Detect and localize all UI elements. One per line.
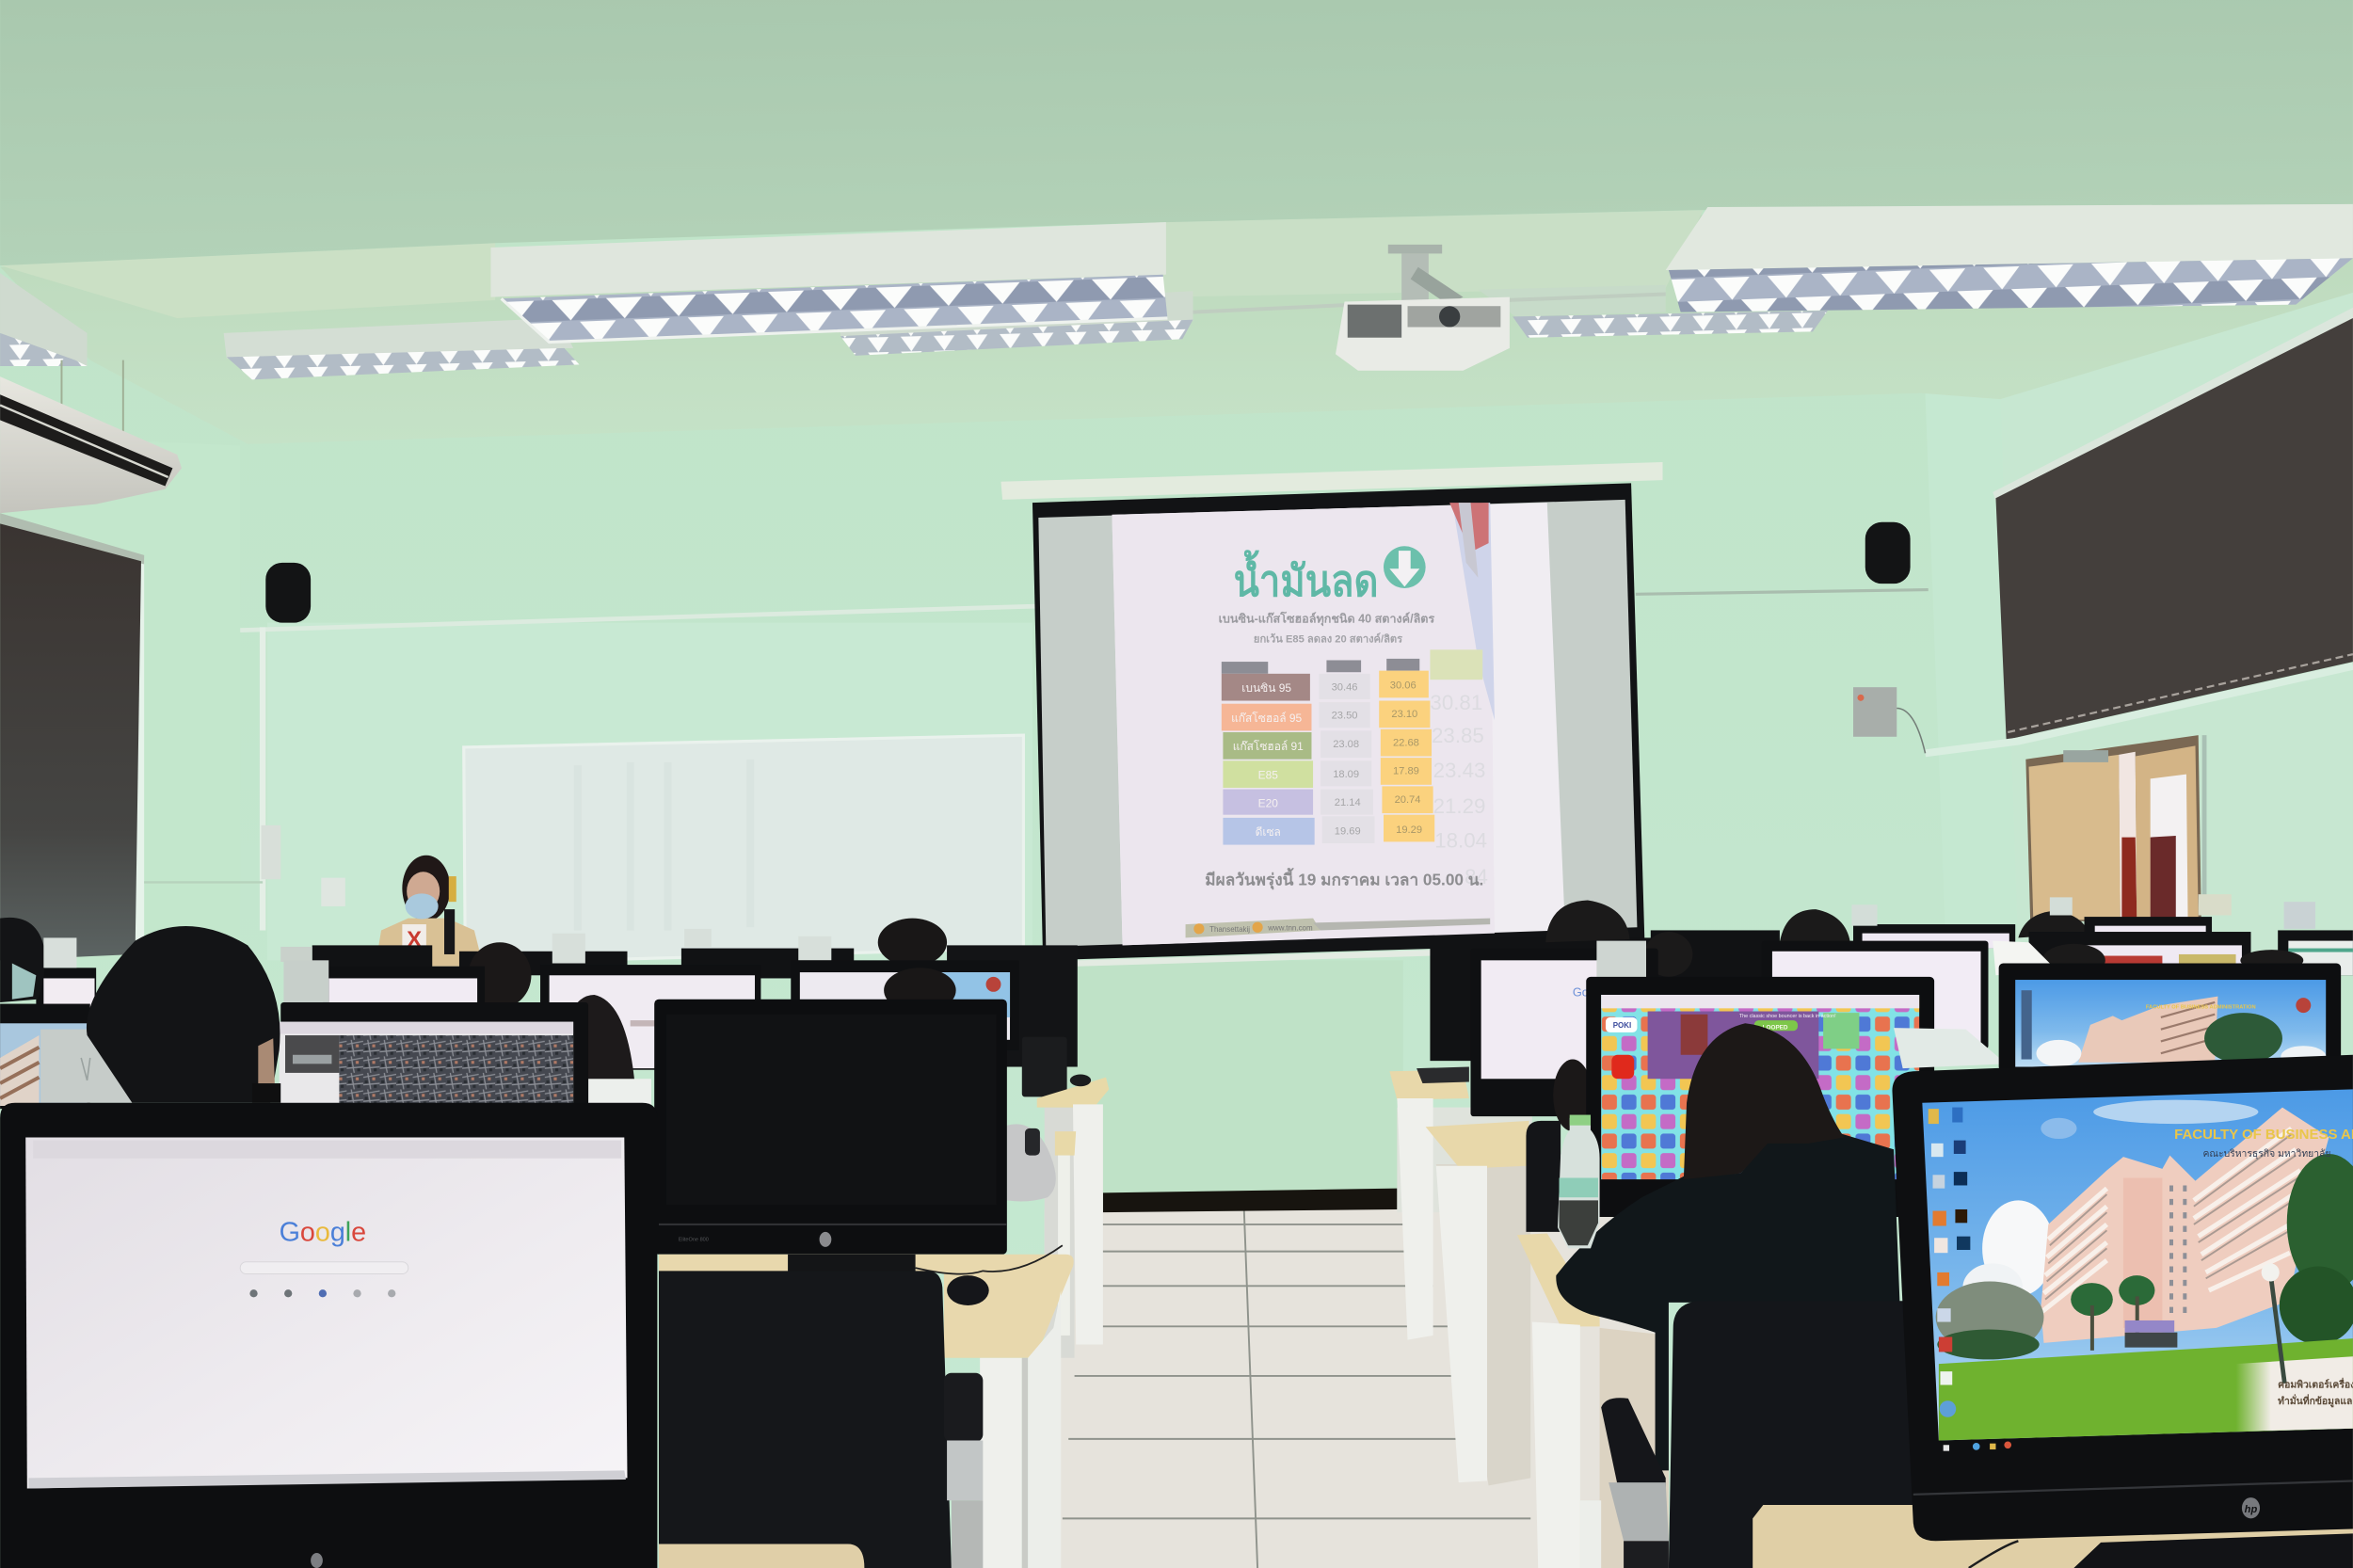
wallpaper building — [2041, 1108, 2329, 1343]
slide: faded price column: 30.81 — [1430, 691, 1482, 714]
slide: faded price column: 23.85 — [1432, 724, 1484, 747]
right window curtain — [1993, 308, 2353, 740]
air conditioner hangers — [61, 360, 123, 442]
back row left monitors — [312, 919, 1078, 1067]
browser logo: Google — [280, 1217, 366, 1247]
browser search box — [240, 1262, 408, 1274]
ceiling light: large right — [1666, 204, 2353, 312]
slide: effective date line: มีผลวันพรุ่งนี้ 19 มกราคม เวลา 05.00 น. — [1205, 868, 1483, 890]
slide: down arrow icon — [1384, 546, 1426, 588]
baseboard — [1103, 1189, 1397, 1212]
slide: footer bar: Thansettakij — [1209, 925, 1250, 934]
plastic water bottle — [1558, 1115, 1600, 1248]
chair behind bottle — [1526, 1121, 1561, 1232]
slide: footer bar: www.tnn.com — [1267, 923, 1313, 932]
slide: old price column: 21.14 — [1335, 797, 1361, 808]
centre front monitor: EliteOne 800 — [679, 1237, 709, 1242]
ceiling light: far left — [0, 273, 88, 366]
wallpaper clouds — [1962, 1100, 2258, 1311]
wallpaper lawn — [1939, 1338, 2353, 1440]
ceiling conduit — [1193, 294, 1666, 312]
slide: blue and red ribbon — [1449, 503, 1495, 720]
slide: subtitle second line: ยกเว้น E85 ลดลง 20 สตางค์/ลิตร — [1254, 632, 1402, 645]
chair back centre — [659, 1271, 983, 1568]
laptop behind centre monitor — [1022, 1037, 1067, 1096]
projector and mount — [1336, 245, 1510, 371]
ceiling light: left small — [224, 318, 579, 379]
ceiling soffit right — [1163, 210, 1704, 297]
centre desk, cable and mouse — [659, 1245, 1074, 1568]
air conditioner — [0, 376, 182, 513]
browser toolbar — [33, 1141, 621, 1159]
slide: new price column: 20.74 — [1395, 794, 1420, 806]
slide: table header tabs — [1222, 649, 1482, 680]
slide: fuel name column: เบนซิน 95 — [1241, 681, 1291, 695]
slide: new price column: 22.68 — [1393, 737, 1419, 748]
slide: faded price column — [1430, 691, 1488, 888]
slide: old price column: 19.69 — [1335, 825, 1361, 837]
slide: new price column: 19.29 — [1396, 824, 1422, 836]
monitor with games — [1586, 977, 1934, 1217]
seated student behind centre monitor — [555, 995, 651, 1106]
left window curtain — [0, 513, 144, 960]
slide: old price column: 23.08 — [1333, 739, 1359, 750]
floor with tiles — [1045, 1209, 1669, 1568]
screen: browser home page — [25, 1137, 628, 1489]
ceiling light: middle small — [840, 291, 1193, 356]
area behind right desks — [1397, 1108, 1532, 1212]
slide: fuel name column: E85 — [1258, 768, 1278, 781]
upper ceiling beam — [0, 0, 2353, 265]
logo on monitor chin: hp — [2245, 1504, 2257, 1515]
right desks — [1389, 1067, 1669, 1568]
paper near right monitors — [1894, 1028, 2007, 1068]
slide: poster background — [1112, 504, 1495, 945]
slide: new price column: 30.06 — [1390, 680, 1417, 692]
slide: fuel name column: ดีเซล — [1256, 825, 1281, 839]
left edge monitors and student — [0, 918, 96, 1109]
door — [2025, 735, 2232, 921]
student head dark right edge — [1553, 1060, 1593, 1131]
screen lower lip — [1078, 950, 1433, 967]
desk corner front left — [659, 1544, 864, 1568]
monitor with map — [280, 1002, 588, 1123]
wallpaper thai heading: คณะบริหารธุรกิจ มหาวิทยาลัย — [2202, 1148, 2330, 1160]
large front monitor right — [1892, 1055, 2353, 1541]
slide: old price column — [1319, 674, 1374, 843]
windows taskbar — [28, 1470, 626, 1489]
second row monitor: centre right — [791, 960, 1019, 1050]
slide: footer bar — [1186, 919, 1490, 937]
slide: faded price column: 23.43 — [1433, 759, 1485, 782]
monitor with campus wallpaper back — [1999, 964, 2341, 1071]
monitor with games: The classic shoe bouncer is back in action! — [1739, 1014, 1836, 1019]
large front monitor left — [0, 1103, 657, 1568]
lower ceiling — [0, 195, 2353, 444]
right back row monitors and students — [1430, 897, 2353, 1061]
projection screen housing — [1000, 462, 1663, 500]
centre front monitor — [654, 1000, 1007, 1255]
speaker left — [265, 563, 311, 623]
student with short black hair — [87, 926, 280, 1103]
second row monitor: left — [323, 967, 485, 1012]
slide: title: น้ำมันลด — [1234, 549, 1378, 606]
slide: fuel name column: แก๊สโซฮอล์ 95 — [1231, 712, 1303, 725]
right monitor white screen — [1470, 941, 1658, 1116]
teacher: X — [407, 927, 422, 952]
right monitor white screen: Go — [1573, 985, 1589, 1000]
wallpaper lamp post — [2262, 1263, 2287, 1384]
wall control box — [1853, 687, 1926, 753]
chair back right — [1601, 1301, 1924, 1568]
slide: fuel name column — [1222, 674, 1315, 845]
monitor with games: LOOPED — [1763, 1025, 1788, 1032]
ceiling light: large centre — [490, 222, 1167, 342]
paper dividers left — [40, 947, 328, 1103]
slide: new price column — [1379, 671, 1434, 841]
projection screen — [1032, 483, 1644, 960]
slide: subtitle: เบนซิน-แก๊สโซฮอล์ทุกชนิด 40 สตางค์/ลิตร — [1219, 612, 1434, 627]
ceiling soffit left — [0, 243, 495, 318]
slide: faded price column: 21.29 — [1433, 794, 1485, 818]
wallpaper trees — [1936, 1154, 2353, 1359]
slide: old price column: 30.46 — [1332, 681, 1358, 693]
second row monitor: centre left — [540, 965, 760, 1070]
wall switch — [321, 878, 345, 906]
right monitor white screen two — [1762, 941, 2056, 1048]
whiteboard — [464, 735, 1023, 964]
speaker right — [1865, 522, 1911, 584]
wall rails — [144, 590, 2353, 930]
windows taskbar icons — [1944, 1441, 2011, 1451]
slide: faded price column: 18.04 — [1434, 829, 1487, 853]
browser shortcuts — [249, 1289, 395, 1297]
monitor with campus wallpaper back: FACULTY OF BUSINESS ADMINISTRATION — [2146, 1004, 2256, 1010]
slide: new price column: 17.89 — [1393, 766, 1419, 777]
slide: fuel name column: E20 — [1258, 797, 1278, 810]
wallpaper sky — [1922, 1089, 2353, 1440]
slide: fuel name column: แก๊สโซฮอล์ 91 — [1233, 740, 1304, 753]
monitor with games: POKI — [1613, 1021, 1631, 1030]
power outlet panel — [262, 825, 280, 879]
wallpaper fade panel — [2236, 1356, 2353, 1432]
ceiling light: right small — [1478, 285, 1828, 338]
desk under front right monitor — [1753, 1505, 2353, 1568]
slide: old price column: 23.50 — [1332, 711, 1358, 722]
slide: old price column: 18.09 — [1333, 769, 1359, 780]
student with long dark hair — [1556, 1023, 1899, 1470]
desktop icons — [1929, 1108, 1970, 1417]
slide: new price column: 23.10 — [1391, 709, 1417, 720]
keyboard and cables under right monitor — [1969, 1533, 2353, 1568]
teacher — [376, 856, 483, 967]
seated student head top — [884, 968, 956, 1013]
logo on monitor chin — [2242, 1497, 2260, 1518]
left desks in aisle — [1007, 1074, 1109, 1358]
slide: faded price column: 84 — [1465, 865, 1488, 888]
